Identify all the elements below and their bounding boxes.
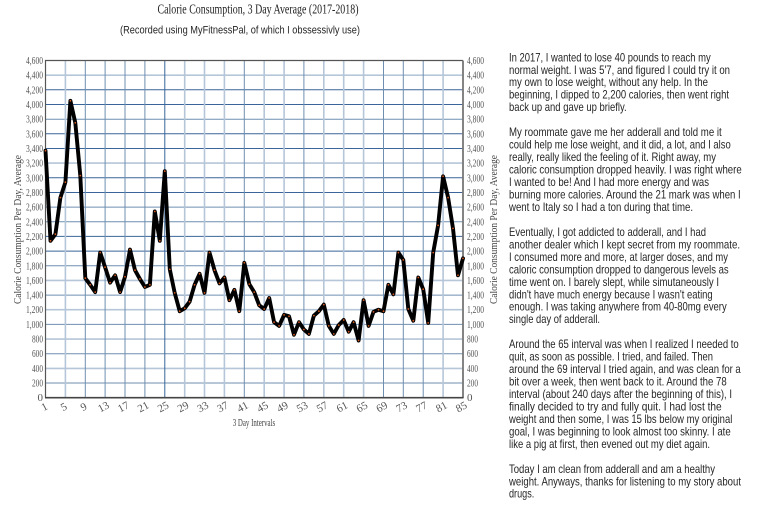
x-axis labels: 13 bbox=[96, 399, 112, 415]
left y-axis labels: 1,400 bbox=[26, 290, 43, 302]
paragraph 1 bbox=[509, 51, 730, 114]
left y-axis labels: 800 bbox=[32, 334, 43, 346]
paragraph 2: went to Italy so I had a ton during that time. bbox=[508, 201, 693, 214]
right y-axis labels: 3,000 bbox=[467, 172, 484, 184]
x-axis labels: 41 bbox=[235, 399, 251, 415]
paragraph 3: time went on. I barely slept, while simutaneously I bbox=[509, 276, 719, 289]
paragraph 5: drugs. bbox=[509, 488, 534, 501]
right y-axis labels: 2,200 bbox=[467, 231, 484, 243]
x-axis labels: 61 bbox=[335, 399, 350, 415]
x-axis labels: 29 bbox=[176, 399, 191, 415]
right y-axis labels: 600 bbox=[467, 348, 478, 360]
right y-axis labels: 4,000 bbox=[467, 99, 484, 111]
left y-axis labels: 600 bbox=[32, 348, 43, 360]
right y-axis labels: 0 bbox=[467, 392, 473, 404]
left y-axis labels: 4,200 bbox=[26, 84, 43, 96]
right y-axis labels: 1,400 bbox=[467, 290, 484, 302]
x-axis labels: 49 bbox=[275, 399, 291, 415]
right y-axis title: Calorie Consumption Per Day, Average bbox=[488, 155, 500, 304]
left y-axis labels: 400 bbox=[32, 363, 43, 375]
right y-axis labels: 3,200 bbox=[467, 158, 484, 170]
x-axis labels: 85 bbox=[454, 399, 470, 415]
right y-axis labels: 2,800 bbox=[467, 187, 484, 199]
x-axis labels: 73 bbox=[394, 399, 410, 415]
left y-axis labels: 3,400 bbox=[26, 143, 43, 155]
paragraph 4: finally decided to try and fully quit. I had lost the bbox=[509, 400, 722, 414]
right y-axis labels: 800 bbox=[467, 334, 478, 346]
paragraph 1: In 2017, I wanted to lose 40 pounds to reach my bbox=[509, 51, 711, 64]
subtitle: (Recorded using MyFitnessPal, of which I obssessivly use) bbox=[120, 24, 360, 36]
paragraph 5: Today I am clean from adderall and am a healthy bbox=[509, 463, 715, 476]
data point markers bbox=[46, 101, 463, 340]
left y-axis labels: 2,600 bbox=[26, 202, 43, 214]
paragraph 1: my own to lose weight, without any help. In the bbox=[509, 76, 708, 89]
paragraph 4 bbox=[508, 338, 741, 451]
line chart bbox=[12, 55, 500, 429]
right y-axis labels: 3,400 bbox=[467, 143, 484, 155]
horizontal gridlines bbox=[46, 75, 463, 383]
left y-axis labels: 200 bbox=[32, 378, 43, 390]
right y-axis labels: 1,200 bbox=[467, 304, 484, 316]
story text bbox=[508, 51, 742, 501]
right y-axis labels: 3,800 bbox=[467, 114, 484, 126]
left y-axis labels: 1,600 bbox=[26, 275, 43, 287]
left y-axis title: Calorie Consumption Per Day, Average bbox=[12, 155, 24, 304]
left y-axis labels: 2,000 bbox=[26, 246, 43, 258]
right y-axis labels: 4,600 bbox=[467, 55, 484, 67]
left y-axis labels: 2,400 bbox=[26, 216, 43, 228]
left y-axis labels: 3,000 bbox=[26, 172, 43, 184]
paragraph 4: quit, as soon as possible. I tried, and failed. Then bbox=[509, 351, 713, 364]
title: Calorie Consumption, 3 Day Average (2017-2018) bbox=[158, 2, 358, 16]
right y-axis labels: 3,600 bbox=[467, 128, 484, 140]
left y-axis labels bbox=[26, 55, 44, 404]
paragraph 2: I wanted to be! And I had more energy and was bbox=[509, 176, 709, 189]
right y-axis labels: 4,400 bbox=[467, 70, 484, 82]
left y-axis labels: 3,200 bbox=[26, 158, 43, 170]
left y-axis labels: 4,000 bbox=[26, 99, 43, 111]
x-axis labels: 37 bbox=[215, 399, 231, 415]
left y-axis labels: 3,800 bbox=[26, 114, 43, 126]
x-axis labels: 21 bbox=[136, 399, 151, 415]
paragraph 4: like a pig at first, then evened out my diet again. bbox=[509, 438, 710, 451]
x-axis labels: 1 bbox=[39, 401, 50, 414]
data line bbox=[46, 101, 463, 340]
right y-axis labels: 4,200 bbox=[467, 84, 484, 96]
left y-axis labels: 1,000 bbox=[26, 319, 43, 331]
x-axis title: 3 Day Intervals bbox=[233, 417, 275, 429]
vertical gridlines bbox=[65, 60, 443, 398]
right y-axis labels: 400 bbox=[467, 363, 478, 375]
right y-axis labels: 2,000 bbox=[467, 246, 484, 258]
x-axis labels bbox=[39, 399, 470, 415]
paragraph 3: single day of adderall. bbox=[509, 313, 600, 326]
x-axis labels: 65 bbox=[355, 399, 370, 415]
paragraph 2: really, really liked the feeling of it. Right away, my bbox=[509, 151, 716, 164]
x-axis labels: 33 bbox=[195, 399, 211, 415]
paragraph 5 bbox=[508, 463, 742, 501]
right y-axis labels bbox=[467, 55, 484, 404]
paragraph 3: didn't have much energy because I wasn't eating bbox=[509, 288, 713, 301]
x-axis labels: 9 bbox=[79, 401, 90, 414]
left y-axis labels: 2,200 bbox=[26, 231, 43, 243]
right y-axis labels: 2,400 bbox=[467, 216, 484, 228]
paragraph 3 bbox=[509, 226, 740, 326]
paragraph 2: My roommate gave me her adderall and told me it bbox=[509, 126, 722, 139]
plot frame bbox=[46, 60, 463, 398]
right y-axis labels: 200 bbox=[467, 378, 478, 390]
left y-axis labels: 4,600 bbox=[26, 55, 43, 67]
x-axis labels: 77 bbox=[414, 399, 430, 415]
left y-axis labels: 1,200 bbox=[26, 304, 43, 316]
x-axis labels: 69 bbox=[374, 399, 390, 415]
left y-axis labels: 4,400 bbox=[26, 70, 43, 82]
left y-axis labels: 0 bbox=[38, 392, 44, 404]
right y-axis labels: 2,600 bbox=[467, 202, 484, 214]
x-axis labels: 25 bbox=[156, 399, 172, 415]
x-axis labels: 5 bbox=[59, 401, 70, 414]
left y-axis labels: 1,800 bbox=[26, 260, 43, 272]
x-axis labels: 57 bbox=[315, 399, 331, 415]
paragraph 3: Eventually, I got addicted to adderall, and I had bbox=[509, 226, 706, 239]
right y-axis labels: 1,800 bbox=[467, 260, 484, 272]
right y-axis labels: 1,600 bbox=[467, 275, 484, 287]
paragraph 2 bbox=[508, 126, 742, 214]
x-axis labels: 81 bbox=[434, 399, 449, 415]
left y-axis labels: 2,800 bbox=[26, 187, 43, 199]
x-axis labels: 17 bbox=[116, 399, 132, 415]
left y-axis labels: 3,600 bbox=[26, 128, 43, 140]
right y-axis labels: 1,000 bbox=[467, 319, 484, 331]
x-axis labels: 53 bbox=[295, 399, 311, 415]
x-axis labels: 45 bbox=[255, 399, 271, 415]
paragraph 1: back up and gave up briefly. bbox=[509, 101, 627, 114]
